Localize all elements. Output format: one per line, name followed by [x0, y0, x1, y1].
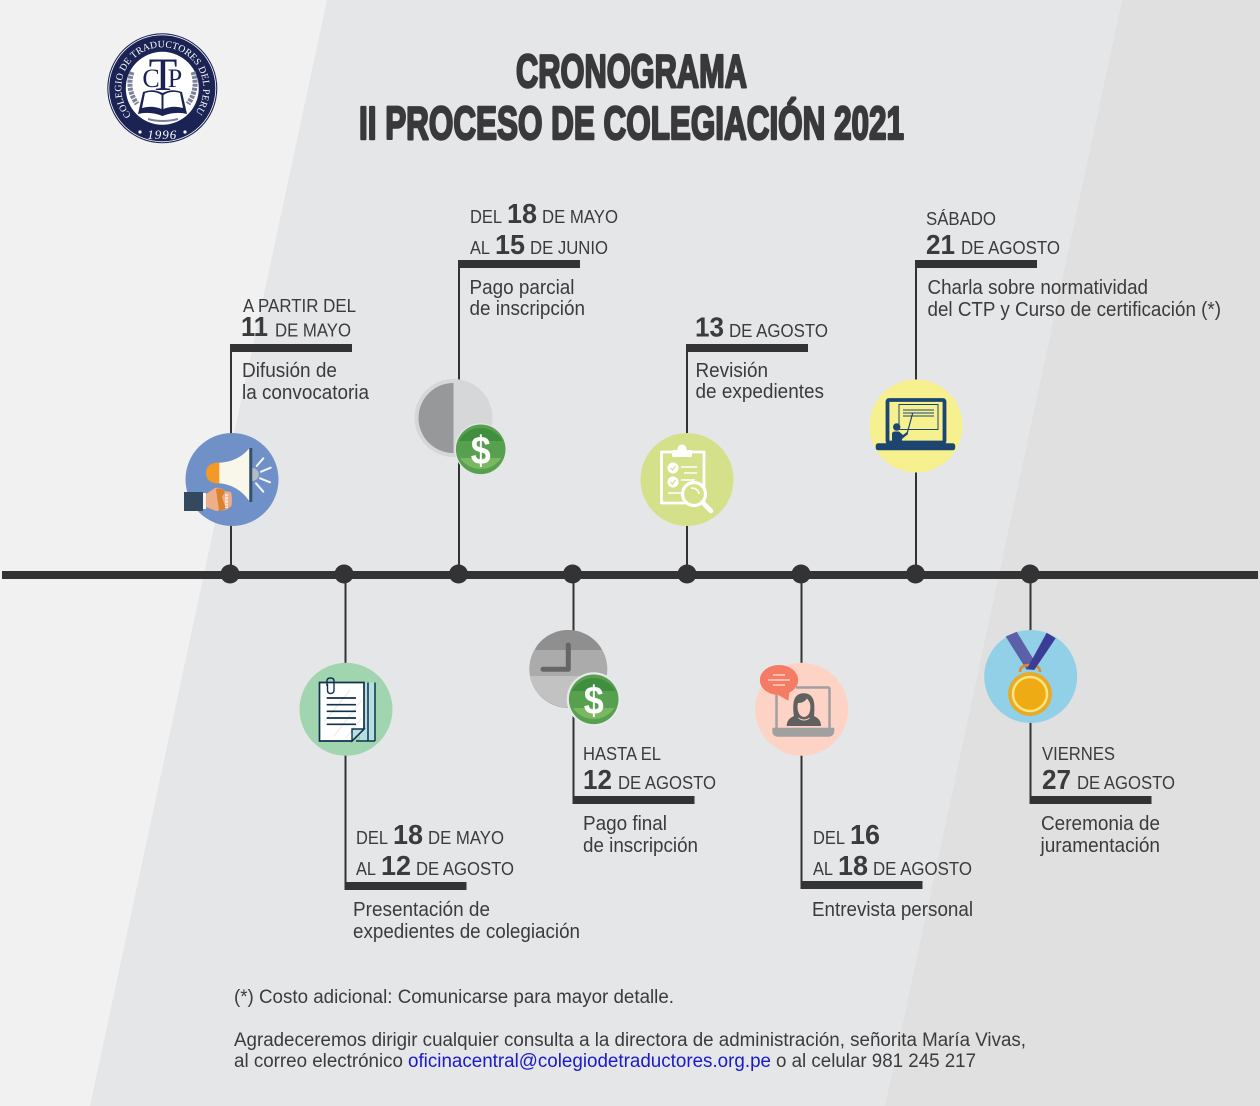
event 8: ceremonia de juramentación: DE AGOSTO [1077, 773, 1175, 793]
event 2: presentación de expedientes: AL [356, 859, 376, 879]
event 1: difusión de la convocatoria: DE MAYO [275, 320, 351, 340]
event 3: pago parcial: AL [470, 238, 490, 258]
event 4: pago final: 12 [583, 764, 612, 795]
icon: medal [984, 630, 1077, 723]
event 1: difusión de la convocatoria: A PARTIR DEL [243, 296, 356, 316]
event 8: ceremonia de juramentación: 27 [1042, 764, 1071, 795]
event 4: pago final: Pago final [583, 813, 667, 835]
event 2: presentación de expedientes: DEL [356, 828, 388, 848]
event 2: presentación de expedientes: DE AGOSTO [416, 859, 514, 879]
event 3: pago parcial: DE JUNIO [530, 238, 608, 258]
event 2: presentación de expedientes [353, 819, 580, 943]
event 2: presentación de expedientes: Presentación de [353, 899, 490, 921]
icon: stacked documents [300, 663, 392, 756]
logo: Colegio de Traductores del Perú: C [142, 64, 160, 93]
footer note: al correo electrónico [234, 1051, 403, 1072]
event 7: charla [926, 209, 1221, 321]
event 7: charla: del CTP y Curso de certificación (*) [928, 299, 1221, 321]
event 1: difusión de la convocatoria: la convocatoria [242, 382, 370, 404]
icon: megaphone [184, 433, 278, 526]
event 6: entrevista personal: 18 [838, 850, 868, 881]
footer note: o al celular 981 245 217 [776, 1051, 976, 1072]
footer note [234, 987, 1026, 1072]
event 5: revisión de expedientes: DE AGOSTO [729, 321, 828, 341]
icon: online interview [755, 663, 848, 756]
event 5: revisión de expedientes: Revisión [696, 360, 768, 382]
event 3: pago parcial: DEL [470, 207, 502, 227]
event 7: charla: Charla sobre normatividad [928, 277, 1148, 299]
logo: Colegio de Traductores del Perú: P [168, 64, 182, 93]
event 3: pago parcial: 18 [507, 198, 537, 229]
icon: clock with dollar [529, 630, 621, 726]
event 8: ceremonia de juramentación: VIERNES [1042, 744, 1115, 764]
event 1: difusión de la convocatoria: Difusión de [242, 360, 337, 382]
event 2: presentación de expedientes: 18 [393, 819, 423, 850]
icon: half pie with dollar [414, 379, 507, 475]
icon: clock with dollar: $ [584, 679, 604, 723]
event 6: entrevista personal: AL [813, 859, 833, 879]
event 1: difusión de la convocatoria [241, 296, 370, 404]
logo: Colegio de Traductores del Perú: 1996 [147, 127, 177, 142]
event 3: pago parcial: de inscripción [470, 298, 585, 320]
title [359, 45, 904, 149]
logo: Colegio de Traductores del Perú: COLEGIO DE TRADUCTORES DEL PERU [114, 40, 210, 118]
event 3: pago parcial: DE MAYO [542, 207, 618, 227]
event 7: charla: DE AGOSTO [961, 238, 1060, 258]
event 8: ceremonia de juramentación: juramentación [1040, 835, 1160, 857]
event 6: entrevista personal: DE AGOSTO [873, 859, 972, 879]
stems and date bars [230, 260, 1152, 890]
event 4: pago final [583, 744, 716, 857]
event 8: ceremonia de juramentación: Ceremonia de [1041, 813, 1160, 835]
event 5: revisión de expedientes [695, 312, 828, 403]
timeline axis with dots [2, 564, 1258, 584]
event 2: presentación de expedientes: expedientes de colegiación [353, 921, 580, 943]
title: II PROCESO DE COLEGIACIÓN 2021 [359, 97, 904, 149]
event 4: pago final: HASTA EL [583, 744, 661, 764]
event 6: entrevista personal [812, 819, 973, 921]
event 2: presentación de expedientes: 12 [381, 850, 411, 881]
title: CRONOGRAMA [516, 45, 747, 97]
icon: clipboard with magnifier [640, 433, 734, 526]
event 3: pago parcial: 15 [495, 229, 525, 260]
logo: Colegio de Traductores del Perú [107, 33, 218, 144]
event 7: charla: SÁBADO [926, 209, 996, 229]
footer note: Agradeceremos dirigir cualquier consulta a la directora de administración, señorita María Vivas, [234, 1030, 1026, 1051]
footer note: (*) Costo adicional: Comunicarse para mayor detalle. [234, 987, 674, 1008]
footer note: oficinacentral@colegiodetraductores.org.pe [408, 1051, 771, 1072]
event 6: entrevista personal: Entrevista personal [812, 899, 973, 921]
event 7: charla: 21 [926, 229, 955, 260]
icon: half pie with dollar: $ [471, 429, 491, 473]
event 5: revisión de expedientes: 13 [695, 312, 724, 342]
event 2: presentación de expedientes: DE MAYO [428, 828, 504, 848]
event 6: entrevista personal: 16 [850, 819, 880, 850]
event 8: ceremonia de juramentación [1040, 744, 1175, 857]
event 3: pago parcial: Pago parcial [470, 277, 574, 299]
logo: Colegio de Traductores del Perú: T [149, 49, 177, 101]
event 4: pago final: DE AGOSTO [618, 773, 716, 793]
icon: teacher at board [870, 380, 962, 472]
event 6: entrevista personal: DEL [813, 828, 845, 848]
event 1: difusión de la convocatoria: 11 [241, 311, 268, 342]
event 5: revisión de expedientes: de expedientes [696, 381, 824, 403]
event 4: pago final: de inscripción [583, 835, 698, 857]
event 3: pago parcial [470, 198, 618, 320]
